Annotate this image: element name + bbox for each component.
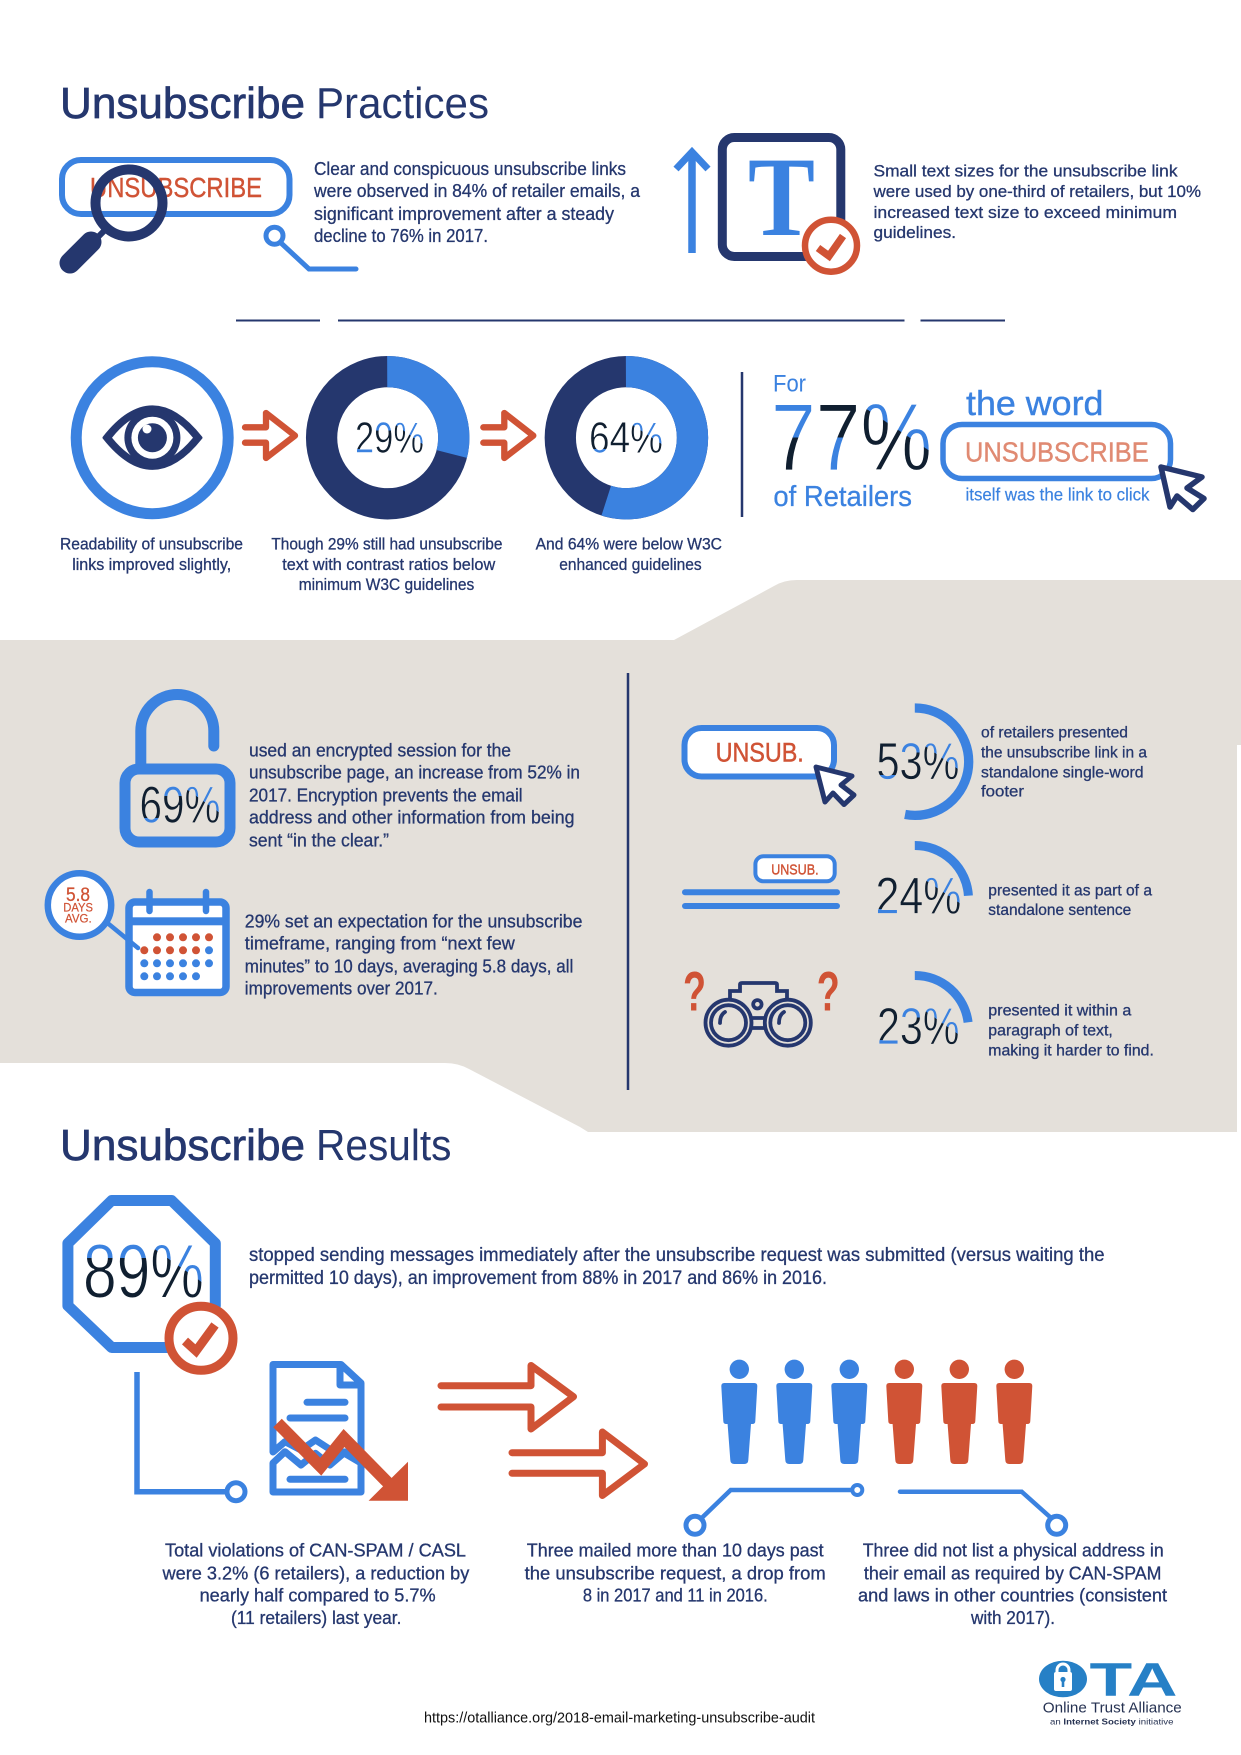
stat: 24% with arc: 24%: [876, 867, 962, 925]
donut chart: 64%: 64%: [589, 414, 663, 463]
logo: Online Trust Alliance: Online Trust Alliance: [1043, 1699, 1182, 1716]
text: within a paragraph: making it harder to find.: [988, 1043, 1154, 1060]
title: Unsubscribe Practices: Practices: [316, 79, 489, 128]
icon: octagon with 89% and check: [68, 1200, 233, 1370]
donut chart: 64%: [560, 372, 693, 504]
icon: small UNSUB button over text lines: UNSUB.: [771, 861, 819, 878]
title: Unsubscribe Practices: Unsubscribe: [60, 79, 305, 128]
text: total violations: nearly half compared to 5.7%: [200, 1585, 436, 1606]
icon: padlock with 69%: [125, 694, 230, 842]
icon: torn document with falling arrow: [273, 1364, 408, 1501]
arrow: upper right-pointing: [441, 1366, 574, 1429]
callout: 5.8 days average badge: [48, 873, 138, 948]
text: standalone footer: the unsubscribe link in a: [981, 744, 1147, 761]
callout: the word unsubscribe was the link: the word: [966, 385, 1104, 423]
icon: padlock with 69%: 69%: [140, 776, 220, 834]
icon: small UNSUB button over text lines: [685, 856, 837, 906]
text: expectation timeframe: timeframe, ranging from “next few: [245, 933, 515, 954]
text: small text sizes: guidelines.: [874, 223, 956, 242]
icon: up arrow: [676, 152, 708, 253]
stat: for 77% of retailers: For: [773, 371, 806, 398]
connector: right people bracket: [900, 1492, 1066, 1534]
text: total violations: Total violations of CAN-SPAM / CASL: [165, 1540, 466, 1561]
grey background band: [0, 580, 1241, 1132]
donut chart: 29%: [322, 372, 454, 504]
connector: link line: [266, 227, 356, 269]
title: Unsubscribe Results: Unsubscribe: [60, 1121, 305, 1170]
donut chart: 29%: 29%: [355, 414, 424, 463]
callout: 5.8 days average badge: AVG.: [65, 914, 92, 926]
text: standalone footer: [981, 724, 1147, 801]
text: clear and conspicuous links: Clear and conspicuous unsubscribe links: [314, 158, 626, 179]
connector: octagon to violations: [137, 1372, 245, 1501]
divider lines: [236, 320, 1005, 322]
icon: binoculars with question marks: ?: [683, 960, 706, 1023]
text: small text sizes: were used by one-third of retailers, but 10%: [873, 182, 1201, 201]
text: encrypted session: [249, 739, 580, 850]
arrow: first donut to second donut: [483, 413, 533, 458]
vertical divider: upper right: [741, 372, 743, 517]
text: encrypted session: unsubscribe page, an increase from 52% in: [249, 761, 580, 782]
text: encrypted session: used an encrypted session for the: [249, 739, 511, 760]
caption: readability: Readability of unsubscribe: [60, 534, 243, 553]
icon: three blue people: [721, 1360, 867, 1464]
title: Unsubscribe Results: Results: [316, 1121, 452, 1170]
text: three mailed late: the unsubscribe request, a drop from: [525, 1562, 826, 1583]
footer: source url: https://otalliance.org/2018-email-marketing-unsubscribe-audit: [424, 1711, 815, 1727]
icon: UNSUB button with cursor: UNSUB.: [716, 738, 804, 768]
caption: 29 percent contrast: [271, 534, 502, 594]
text: within a paragraph: presented it within a: [988, 1003, 1131, 1020]
stat: 53% with arc: [861, 708, 969, 815]
logo: Online Trust Alliance: [1039, 1653, 1182, 1726]
text: three mailed late: Three mailed more than 10 days past: [527, 1540, 824, 1561]
text: clear and conspicuous links: significant improvement after a steady: [314, 203, 615, 224]
caption: readability: links improved slightly,: [72, 555, 231, 574]
stat: 23% with arc: 23%: [877, 998, 960, 1056]
text: within a paragraph: paragraph of text,: [988, 1023, 1113, 1040]
text: total violations: (11 retailers) last year.: [231, 1607, 401, 1628]
caption: 29 percent contrast: text with contrast ratios below: [282, 555, 496, 574]
icon: binoculars with question marks: [683, 960, 840, 1046]
text: clear and conspicuous links: decline to 76% in 2017.: [314, 225, 488, 246]
stat: 53% with arc: 53%: [876, 733, 960, 791]
callout: the word unsubscribe was the link: [943, 385, 1204, 510]
text: within a paragraph: [988, 1003, 1154, 1060]
text: three mailed late: [525, 1540, 826, 1606]
text: expectation timeframe: 29% set an expectation for the unsubscribe: [245, 910, 582, 931]
icon: unsubscribe button under magnifier: [62, 160, 290, 263]
text: encrypted session: address and other information from being: [249, 806, 574, 827]
stat: 23% with arc: [862, 976, 968, 1082]
caption: 64 percent enhanced: [536, 534, 722, 574]
icon: binoculars with question marks: ?: [817, 960, 840, 1023]
logo: Online Trust Alliance: an Internet Society initiative: [1050, 1716, 1174, 1726]
text: standalone sentence: standalone sentence: [988, 902, 1131, 919]
text: three no physical address: and laws in other countries (consistent: [858, 1585, 1167, 1606]
text: total violations: were 3.2% (6 retailers), a reduction by: [162, 1562, 470, 1583]
caption: 64 percent enhanced: enhanced guidelines: [559, 555, 702, 574]
text: standalone footer: footer: [981, 784, 1025, 801]
icon: text size box with check: [722, 135, 857, 272]
text: total violations: [162, 1540, 470, 1628]
callout: 5.8 days average badge: 5.8: [66, 885, 90, 906]
icon: unsubscribe button under magnifier: UNSUBSCRIBE: [90, 172, 262, 203]
text: stopped sending messages: permitted 10 days), an improvement from 88% in 2017 and 86% in 2016.: [249, 1268, 827, 1289]
icon: UNSUB button with cursor: [684, 728, 854, 804]
text: standalone footer: standalone single-word: [981, 764, 1144, 781]
text: three no physical address: [858, 1540, 1167, 1628]
text: stopped sending messages: [249, 1245, 1104, 1289]
text: small text sizes: Small text sizes for the unsubscribe link: [874, 162, 1178, 181]
callout: the word unsubscribe was the link: itself was the link to click: [966, 485, 1150, 505]
text: encrypted session: 2017. Encryption prevents the email: [249, 784, 523, 805]
text: clear and conspicuous links: were observed in 84% of retailer emails, a: [313, 180, 641, 201]
icon: octagon with 89% and check: 89%: [83, 1229, 204, 1314]
text: expectation timeframe: minutes” to 10 days, averaging 5.8 days, all: [245, 955, 573, 976]
caption: 29 percent contrast: minimum W3C guidelines: [299, 575, 474, 594]
icon: calendar with dots: [126, 892, 230, 992]
text: expectation timeframe: improvements over 2017.: [245, 978, 438, 999]
text: three mailed late: 8 in 2017 and 11 in 2016.: [583, 1585, 768, 1606]
arrow: eye to first donut: [245, 413, 295, 458]
connector: left people bracket: [686, 1485, 862, 1534]
title: Unsubscribe Results: [60, 1121, 452, 1170]
caption: readability: [60, 534, 243, 574]
caption: 64 percent enhanced: And 64% were below W3C: [536, 534, 722, 553]
text: standalone sentence: [988, 883, 1152, 919]
text: three no physical address: Three did not list a physical address in: [863, 1540, 1164, 1561]
text: small text sizes: [873, 162, 1201, 242]
text: three no physical address: their email as required by CAN-SPAM: [864, 1562, 1162, 1583]
callout: 5.8 days average badge: DAYS: [63, 903, 93, 915]
text: standalone footer: of retailers presented: [981, 724, 1128, 741]
logo: Online Trust Alliance: TA: [1090, 1653, 1178, 1706]
stat: 24% with arc: [862, 846, 968, 952]
text: clear and conspicuous links: [313, 158, 641, 246]
icon: eye in circle: [76, 362, 228, 514]
stat: for 77% of retailers: 77%: [771, 384, 932, 491]
icon: text size box with check: T: [748, 135, 815, 260]
caption: 29 percent contrast: Though 29% still had unsubscribe: [271, 534, 502, 553]
callout: the word unsubscribe was the link: UNSUBSCRIBE: [965, 437, 1149, 468]
vertical divider: grey panel: [627, 673, 629, 1090]
text: small text sizes: increased text size to exceed minimum: [874, 203, 1177, 222]
text: expectation timeframe: [245, 910, 582, 999]
stat: for 77% of retailers: of Retailers: [773, 481, 912, 513]
icon: three orange people: [886, 1360, 1032, 1464]
arrow: lower right-pointing: [512, 1432, 644, 1496]
text: encrypted session: sent “in the clear.”: [249, 829, 389, 850]
title: Unsubscribe Practices: [60, 79, 489, 128]
text: standalone sentence: presented it as part of a: [988, 883, 1152, 900]
text: three no physical address: with 2017).: [970, 1607, 1055, 1628]
text: stopped sending messages: stopped sending messages immediately after the unsubscribe request was submitted (versus waiting the: [249, 1245, 1104, 1266]
